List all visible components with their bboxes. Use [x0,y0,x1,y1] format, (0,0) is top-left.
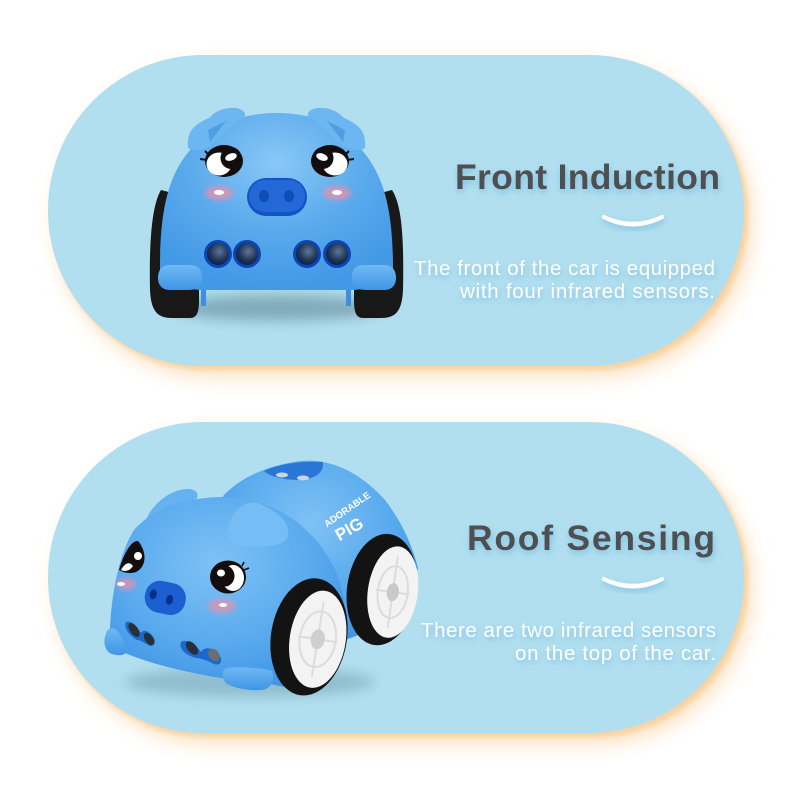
car: angled view pig [104,461,425,701]
heading: front induction: Front Induction [455,157,720,197]
car: front view pig [150,108,403,321]
description: on the top of the car. [515,642,716,665]
smile divider [602,576,664,588]
description [421,619,716,665]
panel: roof sensing [48,422,752,743]
right ear [228,502,288,547]
sensors [125,621,222,665]
snout [247,178,307,216]
body [160,113,393,290]
front body [110,497,347,690]
description: The front of the car is equipped [414,257,715,280]
description: with four infrared sensors. [459,280,715,303]
left ear [144,489,198,530]
heading: roof sensing: Roof Sensing [467,518,715,558]
sticker text: ADORABLE [322,490,373,530]
rear wheel [340,529,425,650]
rear body [223,461,418,640]
description [414,257,715,303]
ears [188,108,365,150]
wheels [150,190,403,318]
eyes [119,541,249,594]
blush [116,578,236,613]
smile divider [602,214,664,226]
front wheel [262,573,356,701]
sticker text: PIG [332,514,367,545]
snout [142,578,189,618]
infrared sensors [206,242,350,266]
eyes [200,145,354,177]
feet [158,265,396,290]
panel: front induction [48,55,752,376]
roof sensor [264,462,323,480]
front feet [104,628,273,690]
description: There are two infrared sensors [421,619,716,642]
blush [205,186,351,200]
